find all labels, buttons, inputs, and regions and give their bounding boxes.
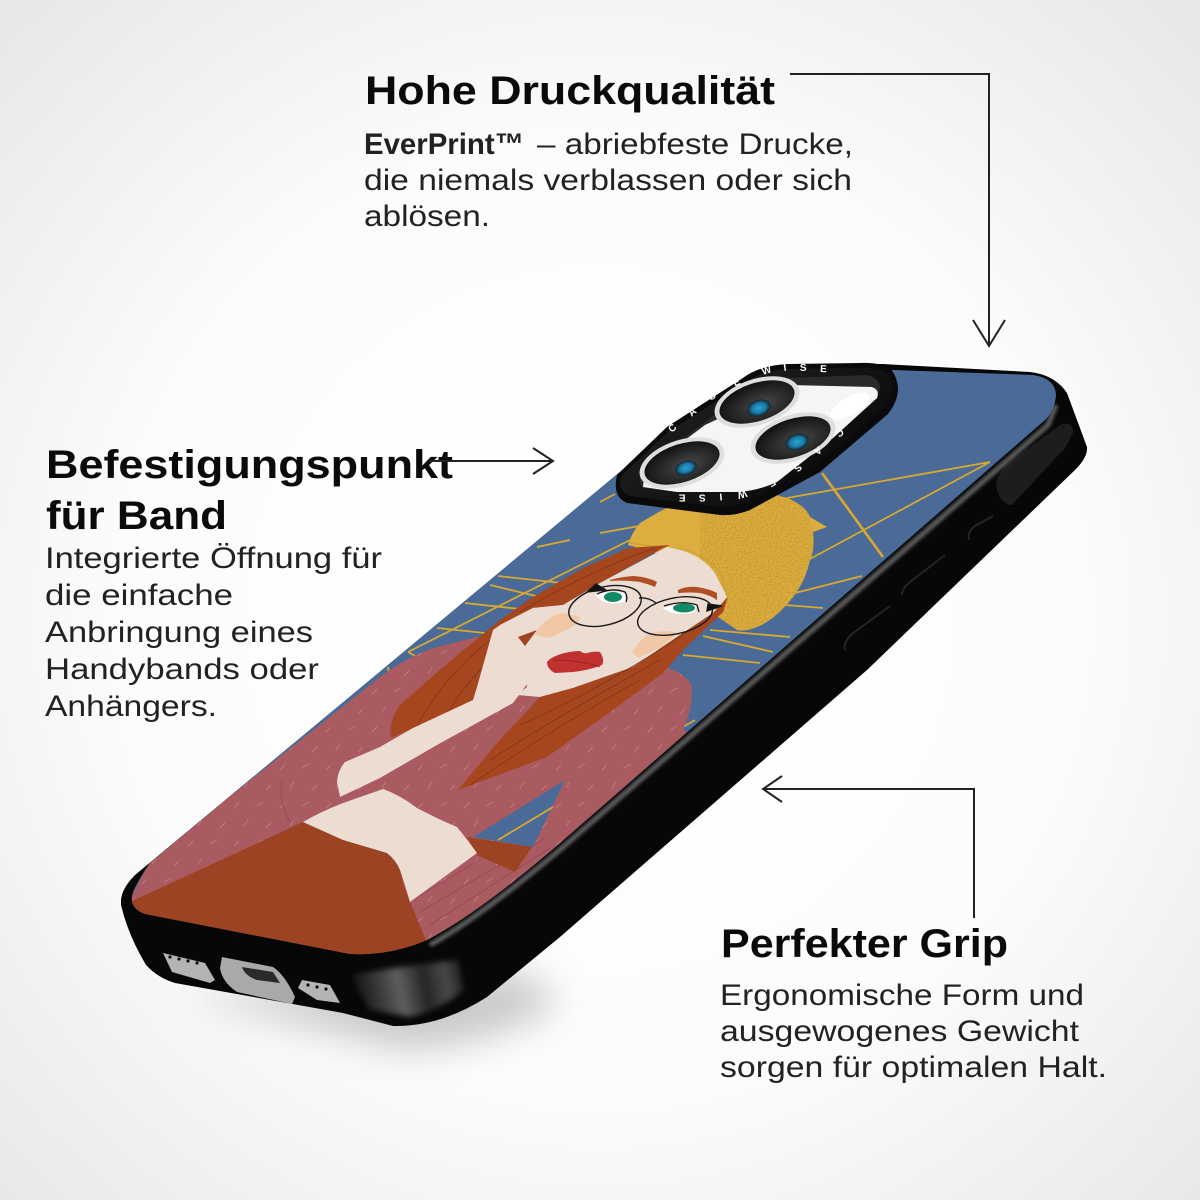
hair front	[458, 597, 728, 790]
lens left	[633, 428, 731, 498]
artwork background	[132, 370, 1056, 954]
body: grip: sorgen für optimalen Halt.	[720, 1051, 1107, 1084]
body: print quality: – abriebfeste Drucke,	[537, 128, 853, 161]
hat	[628, 495, 827, 631]
lens right	[744, 403, 842, 473]
bump text top: CASEWISE	[666, 363, 827, 435]
text block: print quality	[364, 69, 853, 233]
well flash	[826, 387, 874, 425]
text block: strap attachment	[45, 443, 453, 723]
corner highlight	[352, 960, 464, 1017]
arrow: grip	[763, 776, 974, 918]
sweater	[130, 637, 705, 950]
face	[500, 547, 727, 697]
rim highlight	[430, 405, 1056, 945]
camera bump	[616, 363, 898, 515]
well white	[643, 385, 878, 492]
midriff	[303, 789, 477, 902]
body: strap attachment: Anbringung eines	[45, 616, 313, 649]
body: grip: ausgewogenes Gewicht	[720, 1015, 1080, 1048]
body: grip	[720, 979, 1107, 1084]
hair back	[390, 545, 670, 738]
eyebrows	[610, 576, 717, 600]
text block: grip	[720, 922, 1107, 1084]
gap line	[498, 807, 553, 840]
body: strap attachment: Integrierte Öffnung für	[45, 542, 382, 575]
eyes	[595, 590, 699, 614]
body: grip: Ergonomische Form und	[720, 979, 1084, 1012]
blush left	[535, 613, 580, 638]
phone shadow	[190, 970, 560, 1050]
charging port	[220, 957, 295, 1004]
side buttons	[845, 516, 993, 650]
speaker left	[163, 953, 215, 983]
body: print quality: ablösen.	[364, 200, 490, 233]
arrow: strap attachment	[430, 448, 553, 474]
phone body	[121, 364, 1087, 1026]
phone mockup	[100, 350, 1100, 1026]
dress piece	[467, 837, 532, 872]
heading: print quality: Hohe Druckqualität	[365, 69, 775, 113]
bump ring	[616, 363, 898, 515]
lens top	[708, 367, 806, 437]
heading: strap attachment	[46, 443, 453, 538]
arrow: print quality	[790, 74, 1005, 346]
blush right	[632, 631, 678, 658]
body: strap attachment	[45, 542, 382, 723]
body: strap attachment: Handybands oder	[45, 653, 319, 686]
heading: grip: Perfekter Grip	[721, 922, 1008, 966]
finger shade	[518, 630, 537, 646]
body: strap attachment: Anhängers.	[45, 690, 217, 723]
strap slot	[996, 424, 1073, 505]
body: print quality	[364, 128, 853, 233]
dress	[130, 822, 428, 960]
gold lines	[387, 461, 990, 728]
heading: strap attachment: für Band	[46, 494, 227, 538]
speaker right	[298, 980, 340, 1003]
body: strap attachment: die einfache	[45, 579, 233, 612]
body: print quality: die niemals verblassen oder sich	[364, 164, 852, 197]
background gap	[473, 780, 565, 847]
arm and hand	[337, 605, 563, 797]
lips	[547, 651, 603, 673]
glasses	[568, 583, 722, 636]
body: print quality: EverPrint™	[364, 128, 524, 161]
bump top face	[620, 368, 893, 507]
camera well	[640, 375, 880, 492]
bump text bottom: CASEWISE	[678, 426, 846, 503]
heading: strap attachment: Befestigungspunkt	[46, 443, 453, 487]
case artwork	[132, 370, 1056, 954]
